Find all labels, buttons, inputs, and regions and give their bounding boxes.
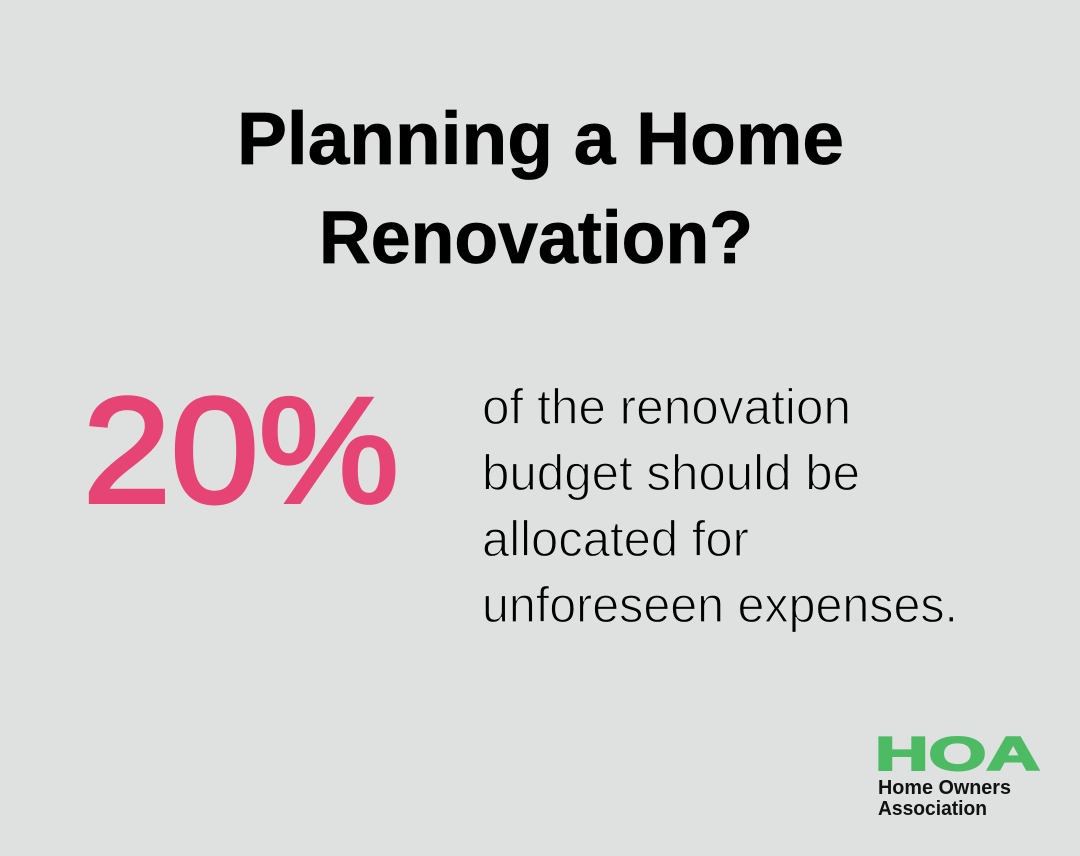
logo: Home Owners Association [875,727,1040,820]
statistic description [482,379,958,633]
statistic description: allocated for [482,511,749,567]
title: Planning a Home [237,97,844,180]
statistic description: budget should be [482,445,860,501]
title [237,97,844,279]
logo: Home Owners Association: HOA [875,727,1040,780]
statistic description: of the renovation [482,379,851,435]
title: Renovation? [319,196,753,279]
logo: Home Owners Association: Home Owners [878,777,1011,799]
big statistic: 20%: 20% [83,366,399,534]
logo: Home Owners Association: Association [878,798,987,820]
statistic description: unforeseen expenses. [482,577,958,633]
